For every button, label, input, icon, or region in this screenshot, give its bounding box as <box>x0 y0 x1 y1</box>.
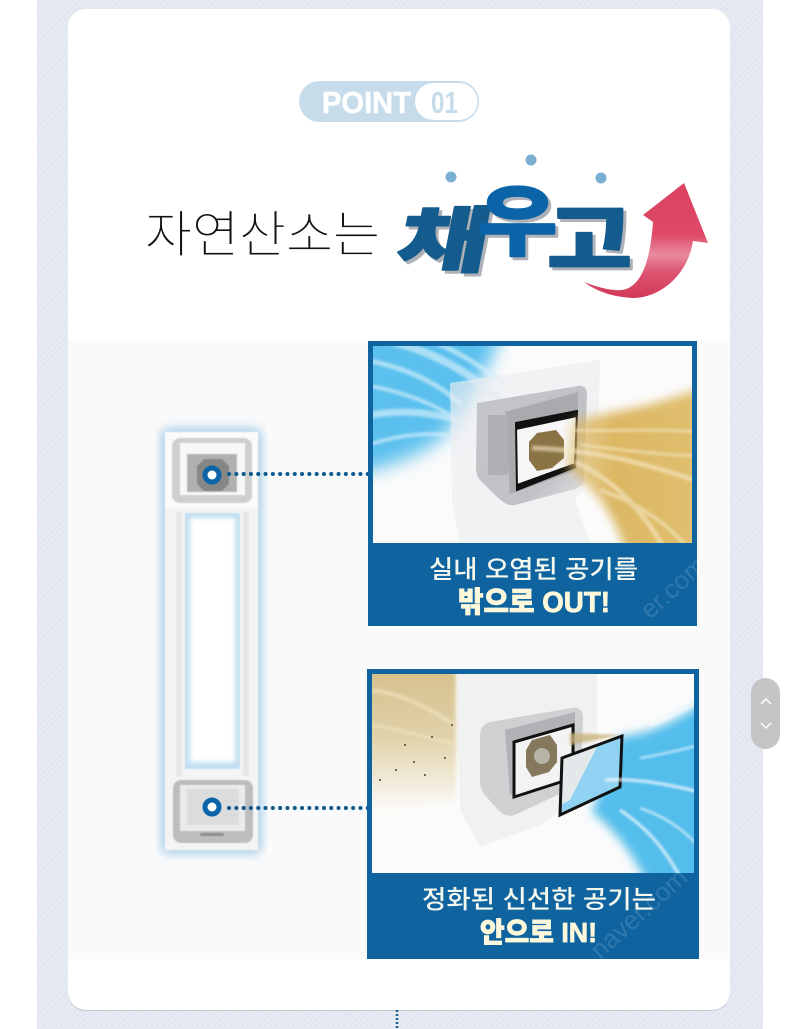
caption: air in <box>422 886 656 948</box>
badge: POINT 01: POINT <box>322 85 411 120</box>
decorative blue dots above heading <box>446 154 606 184</box>
caption: air in: 안으로 IN! <box>480 917 597 948</box>
heading: 채우고: 채 <box>391 203 497 282</box>
heading: 채우고: 우 <box>481 183 560 269</box>
illustration: purified intake airflow through filter <box>372 674 694 873</box>
product illustration: vertical ventilation unit <box>161 428 262 854</box>
heading: 채우고 <box>391 180 635 286</box>
badge: POINT 01: 01 <box>431 85 458 120</box>
scroll control <box>751 678 780 749</box>
caption: air out: 밖으로 OUT! <box>458 586 610 619</box>
heading: 채우고: 채 <box>394 206 500 285</box>
panel: air out <box>368 341 697 626</box>
watermarks: er.com <box>634 550 712 624</box>
caption: air out <box>429 556 638 619</box>
heading: 채우고: 고 <box>547 199 632 283</box>
watermarks <box>584 550 712 964</box>
bottom marker with dotted connector <box>205 800 368 814</box>
icon: red curved up arrow <box>584 183 708 298</box>
top marker with dotted connector <box>205 468 368 482</box>
heading: 자연산소는: 자연산소는 <box>145 207 380 263</box>
illustration: exhaust airflow through unit <box>373 346 692 543</box>
panel: air in <box>367 669 699 959</box>
heading: 채우고: 고 <box>550 202 635 286</box>
bottom dotted connector <box>396 1010 398 1029</box>
caption: air in: 정화된 신선한 공기는 <box>422 886 656 914</box>
badge: POINT 01 <box>299 81 479 122</box>
caption: air out: 실내 오염된 공기를 <box>429 556 638 584</box>
lower section background <box>68 340 730 959</box>
watermarks: naver.com <box>584 862 693 964</box>
heading: 채우고: 우 <box>478 180 557 266</box>
